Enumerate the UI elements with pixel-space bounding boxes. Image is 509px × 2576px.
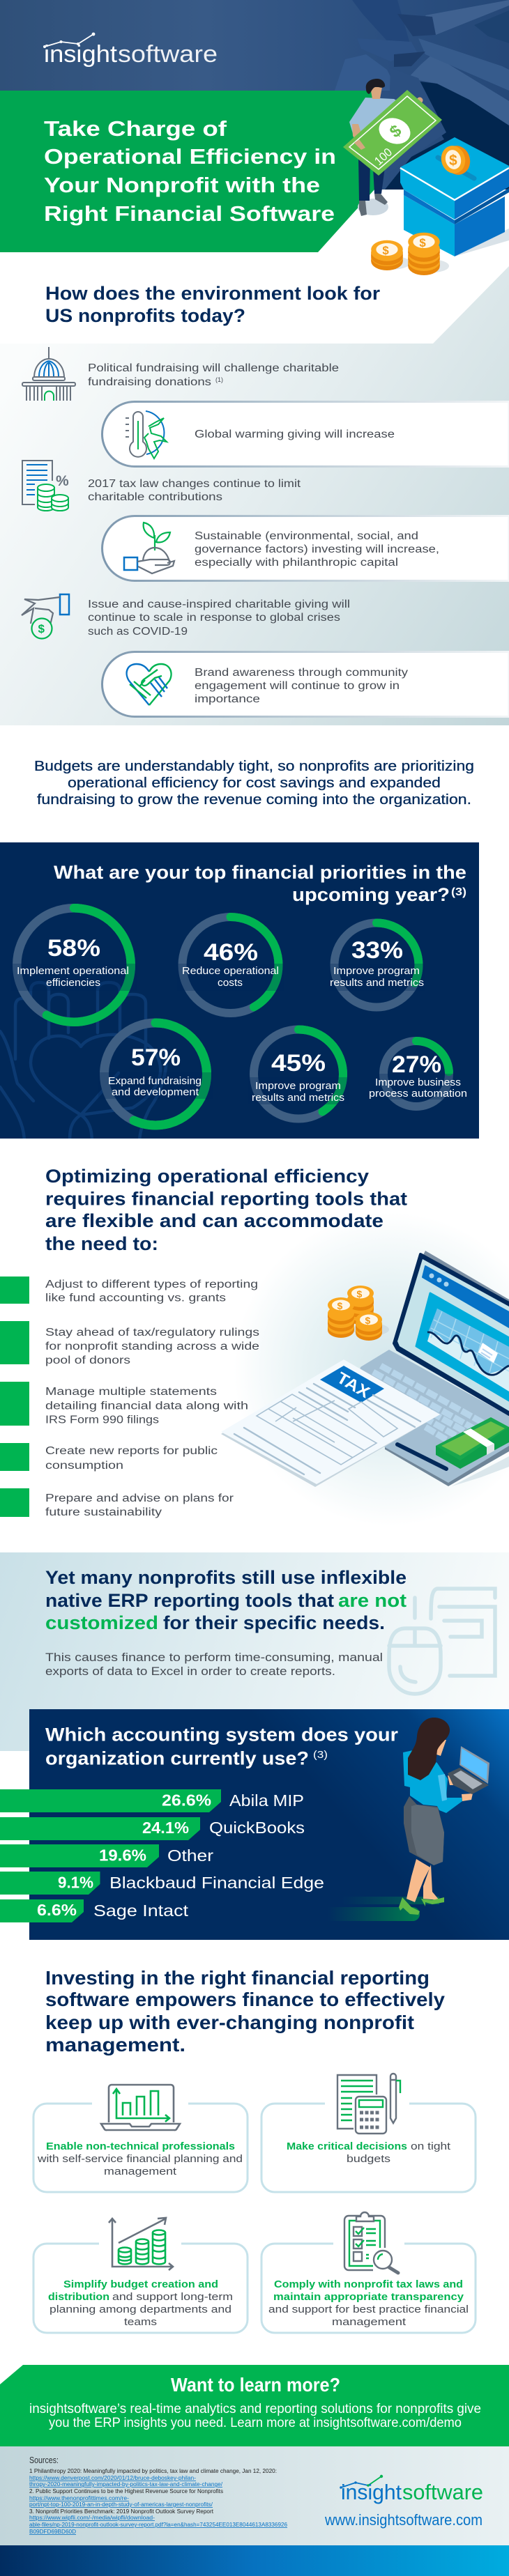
text: cause-inspired giving: Issue and cause-inspired charitable giving will: [88, 599, 350, 610]
bar: QuickBooks 24.1%: 24.1%: [142, 1819, 189, 1837]
text: 2017 tax law: charitable contributions: [88, 491, 222, 503]
card: enable non-technical professionals: [33, 2085, 248, 2192]
panel: accounting system survey: [0, 1709, 509, 1940]
heading: accounting system: organization currently use?: [45, 1748, 309, 1768]
illustration: donation box with coins: [371, 137, 509, 275]
heading: environment: US nonprofits today?: [45, 305, 245, 326]
heading: optimizing efficiency: requires financial reporting tools that: [45, 1189, 407, 1210]
text: sources: port/npt-top-100-2019-an-in-depth-study-of-americas-largest-nonprofits/: [29, 2501, 213, 2508]
panel: pill sustainable investing: Sustainable (environmental, social, and: [195, 530, 418, 542]
donut 33% improve program results and metrics: Improve program: [333, 966, 420, 977]
list: reporting needs: for nonprofit standing across a wide: [45, 1341, 259, 1352]
logo: insightsoftware white: [43, 33, 218, 68]
text: sources: 3. Nonprofit Priorities Benchmark: 2019 Nonprofit Outlook Survey Report: [29, 2508, 214, 2515]
text: sources: 1 Philanthropy 2020: Meaningfully impacted by politics, tax law and climate change, Jan 12, 2020:: [29, 2468, 277, 2474]
list: reporting needs: future sustainability: [45, 1506, 162, 1518]
text: 2017 tax law: [88, 478, 301, 503]
list: reporting needs: like fund accounting vs. grants: [45, 1292, 226, 1304]
title: Take Charge of: [44, 116, 227, 141]
heading: inflexible ERP tools: customized: [45, 1612, 158, 1633]
text: sources: thropy-2020-meaningfully-impacted-by-politics-tax-law-and-climate-change/: [29, 2481, 223, 2488]
bar: Other 19.6%: Other: [167, 1846, 213, 1865]
illustration: man holding a banknote: 100: [372, 146, 395, 168]
header photo background: [0, 0, 509, 190]
card: make critical decisions: Make critical decisions: [287, 2141, 407, 2152]
card: make critical decisions: budgets: [347, 2154, 390, 2165]
text: political fundraising: (1): [215, 376, 223, 383]
text: budgets statement: Budgets are understandably tight, so nonprofits are prioritizing: [34, 759, 474, 774]
logo: insightsoftware color: insight: [341, 2480, 402, 2504]
bar: Abila MIP 26.6%: [0, 1789, 304, 1812]
bar: QuickBooks 24.1%: [0, 1817, 305, 1840]
text: budgets statement: [34, 759, 474, 808]
card: comply with tax laws: [261, 2212, 476, 2333]
heading: accounting system: Which accounting system does your: [45, 1724, 399, 1745]
logo: insightsoftware white: software: [118, 41, 218, 68]
illustration: man holding a banknote: $: [386, 121, 406, 142]
heading: accounting system: (3): [313, 1749, 328, 1761]
list: reporting needs: Manage multiple statements: [45, 1386, 217, 1398]
panel: call to action: [0, 2365, 509, 2446]
donut 58% implement operational efficiencies: [11, 908, 137, 1022]
card: comply with tax laws: management: [332, 2317, 406, 2328]
panel: call to action: Want to learn more?: [171, 2374, 340, 2396]
panel: pill sustainable investing: especially with philanthropic capital: [195, 557, 398, 569]
illustration: donation box with coins: $: [419, 236, 426, 249]
text: 2017 tax law: 2017 tax law changes continue to limit: [88, 478, 301, 490]
card: simplify budget creation: planning among departments and: [50, 2304, 231, 2315]
panel: financial priorities: [0, 842, 479, 1143]
illustration: donation box with coins: $: [449, 153, 457, 169]
text: sources: Sources:: [29, 2455, 59, 2465]
bar: Sage Intact 6.6%: Sage Intact: [93, 1902, 189, 1920]
heading: optimizing efficiency: the need to:: [45, 1233, 158, 1254]
donut 33% improve program results and metrics: results and metrics: [330, 978, 424, 989]
icon: mouse and document watermark: [389, 1589, 495, 1694]
panel: pill brand awareness: importance: [195, 693, 260, 705]
card: comply with tax laws: maintain appropriate transparency: [273, 2292, 464, 2303]
panel: pill brand awareness: engagement will continue to grow in: [195, 680, 400, 692]
heading: inflexible ERP tools: [45, 1567, 407, 1633]
text: manual exports: This causes finance to perform time-consuming, manual: [45, 1651, 383, 1664]
card: make critical decisions: on tight: [411, 2141, 450, 2152]
donut 27% improve business process automation: 27%: [392, 1051, 441, 1078]
list: reporting needs: Prepare and advise on plans for: [45, 1493, 234, 1504]
donut 57% expand fundraising and development: [98, 1023, 213, 1125]
donut 58% implement operational efficiencies: efficiencies: [46, 978, 100, 989]
icon: document, calculator and pen: [337, 2074, 400, 2134]
heading: environment: How does the environment look for: [45, 283, 381, 304]
text: sources: https://www.thenonprofittimes.com/re-: [29, 2495, 129, 2501]
bar: Abila MIP 26.6%: 26.6%: [162, 1791, 211, 1809]
panel: pill sustainable investing: governance factors) investing will increase,: [195, 543, 439, 555]
text: sources: B09DFD69BD60D: [29, 2529, 76, 2535]
list: reporting needs: Stay ahead of tax/regulatory rulings: [45, 1327, 259, 1339]
heading: priorities: (3): [451, 886, 466, 898]
panel: pill global warming: Global warming giving will increase: [195, 429, 395, 440]
heading: priorities: What are your top financial priorities in the: [54, 862, 466, 883]
panel: call to action: you the ERP insights you need. Learn more at insightsoftware.com/demo: [49, 2416, 462, 2430]
title: Right Financial Software: [44, 201, 335, 226]
illustration: woman with laptop: [328, 1718, 489, 1921]
donut 27% improve business process automation: Improve business: [375, 1077, 461, 1088]
text: political fundraising: fundraising donations: [88, 376, 211, 388]
background: hands and heart outline: [0, 982, 166, 1143]
illustration: laptop, tax form, coins and cash: [221, 1251, 509, 1487]
illustration: laptop, tax form, coins and cash: $: [365, 1315, 371, 1326]
glow behind illustration: [234, 1212, 509, 1526]
icon: hand dropping a coin: $: [38, 622, 45, 635]
text: manual exports: exports of data to Excel in order to create reports.: [45, 1665, 335, 1678]
illustration: man holding a banknote: [343, 79, 442, 216]
illustration: donation box with coins: $: [382, 244, 389, 257]
illustration: laptop, tax form, coins and cash: TAX: [334, 1368, 374, 1402]
logo: insightsoftware color: software: [402, 2480, 483, 2504]
text: cause-inspired giving: continue to scale in response to global crises: [88, 612, 340, 624]
bar: Sage Intact 6.6%: 6.6%: [37, 1901, 77, 1919]
card: simplify budget creation: teams: [124, 2317, 157, 2328]
donut 27% improve business process automation: process automation: [369, 1088, 467, 1100]
panel: pill global warming: [102, 401, 509, 467]
card: make critical decisions: [261, 2074, 476, 2192]
heading: optimizing efficiency: are flexible and can accommodate: [45, 1210, 383, 1231]
title: [44, 116, 336, 226]
donut 46% reduce operational costs: costs: [218, 978, 243, 989]
heading: investing in reporting software: Investing in the right financial reporting: [45, 1967, 430, 1989]
heading: inflexible ERP tools: native ERP reporting tools that: [45, 1590, 334, 1611]
list: reporting needs: Create new reports for public: [45, 1445, 218, 1457]
heading: environment: [45, 283, 381, 326]
card: comply with tax laws: Comply with nonprofit tax laws and: [274, 2279, 463, 2290]
card: simplify budget creation: [33, 2218, 248, 2333]
text: sources: able-files/np-2019-nonprofit-outlook-survey-report.pdf?la=en&hash=743254EE013E8044613A8336926: [29, 2522, 288, 2528]
title: Operational Efficiency in: [44, 144, 336, 169]
text: website url: www.insightsoftware.com: [324, 2511, 483, 2529]
text: political fundraising: [88, 362, 339, 388]
donut 27% improve business process automation: [369, 1041, 467, 1106]
bar: Abila MIP 26.6%: Abila MIP: [229, 1791, 304, 1810]
donut 33% improve program results and metrics: 33%: [351, 937, 403, 964]
text: cause-inspired giving: [88, 599, 350, 638]
panel: inflexible ERP tools background: [0, 1552, 509, 1751]
list: reporting needs: detailing financial data along with: [45, 1401, 248, 1412]
card: simplify budget creation: and support long-term: [112, 2292, 233, 2303]
text: manual exports: [45, 1651, 383, 1678]
heading: optimizing efficiency: Optimizing operational efficiency: [45, 1166, 369, 1187]
heading: investing in reporting software: [45, 1967, 445, 2056]
text: sources: https://www.denverpost.com/2020/01/12/bruce-deboskey-philan-: [29, 2475, 196, 2481]
card: enable non-technical professionals: Enable non-technical professionals: [46, 2141, 235, 2152]
heading: priorities: upcoming year?: [292, 884, 450, 905]
text: sources: https://www.wipfli.com/-/media/wipfli/download-: [29, 2515, 155, 2521]
panel: sources background: [0, 2446, 509, 2545]
icon: heart handshake: [127, 664, 172, 705]
list: reporting needs: [0, 1277, 259, 1518]
heading: inflexible ERP tools: for their specific needs.: [163, 1612, 385, 1633]
donut 45% improve program results and metrics: [248, 1030, 349, 1119]
heading: investing in reporting software: management.: [45, 2034, 185, 2056]
card: enable non-technical professionals: with self-service financial planning and: [37, 2154, 243, 2165]
icon: thermometer and globe: [126, 411, 167, 458]
panel: pill brand awareness: Brand awareness through community: [195, 667, 408, 679]
donut 46% reduce operational costs: [177, 917, 284, 1013]
heading: accounting system: [45, 1724, 399, 1768]
bar: Other 19.6%: [0, 1844, 213, 1867]
donut 57% expand fundraising and development: Expand fundraising: [108, 1076, 202, 1087]
text: budgets statement: operational efficiency for cost savings and expanded: [68, 776, 441, 791]
icon: clipboard checklist with magnifier: [344, 2212, 398, 2273]
list: reporting needs: IRS Form 990 filings: [45, 1414, 159, 1426]
panel: green title banner: [0, 91, 374, 252]
illustration: laptop, tax form, coins and cash: $: [337, 1300, 343, 1311]
heading: inflexible ERP tools: Yet many nonprofits still use inflexible: [45, 1567, 407, 1588]
donut 57% expand fundraising and development: 57%: [131, 1044, 181, 1071]
bar: Blackbaud Financial Edge 9.1%: 9.1%: [58, 1873, 93, 1891]
bar: Sage Intact 6.6%: [0, 1899, 189, 1922]
bar: Other 19.6%: 19.6%: [99, 1846, 146, 1865]
donut 58% implement operational efficiencies: 58%: [47, 935, 100, 962]
text: budgets statement: fundraising to grow the revenue coming into the organization.: [37, 792, 471, 808]
bar: Blackbaud Financial Edge 9.1%: [0, 1872, 324, 1895]
icon: capitol building: [22, 347, 75, 401]
donut 46% reduce operational costs: 46%: [204, 939, 258, 966]
heading: investing in reporting software: keep up with ever-changing nonprofit: [45, 2012, 414, 2033]
donut 58% implement operational efficiencies: Implement operational: [17, 966, 129, 977]
heading: investing in reporting software: software empowers finance to effectively: [45, 1989, 445, 2010]
text: political fundraising: Political fundraising will challenge charitable: [88, 362, 339, 374]
title: Your Nonprofit with the: [44, 173, 320, 197]
donut 33% improve program results and metrics: [329, 923, 425, 1008]
icon: laptop with chart: [101, 2085, 180, 2130]
heading: priorities: [54, 862, 466, 905]
list: reporting needs: Adjust to different types of reporting: [45, 1279, 258, 1290]
list: reporting needs: pool of donors: [45, 1355, 130, 1366]
text: cause-inspired giving: such as COVID-19: [88, 626, 188, 638]
donut 57% expand fundraising and development: and development: [112, 1087, 199, 1098]
logo: insightsoftware color: [340, 2475, 483, 2504]
footer gradient bar: [0, 2545, 509, 2576]
card: simplify budget creation: Simplify budget creation and: [63, 2279, 218, 2290]
illustration: laptop, tax form, coins and cash: $: [357, 1288, 363, 1299]
donut 45% improve program results and metrics: 45%: [271, 1050, 326, 1077]
floor white area: [318, 190, 509, 279]
heading: inflexible ERP tools: are not: [338, 1590, 407, 1611]
card: comply with tax laws: and support for best practice financial: [268, 2304, 469, 2315]
icon: hand dropping a coin: [22, 594, 69, 638]
bar: QuickBooks 24.1%: QuickBooks: [209, 1819, 305, 1837]
bar: Blackbaud Financial Edge 9.1%: Blackbaud Financial Edge: [109, 1874, 324, 1892]
icon: growth chart with coin stacks: [109, 2218, 173, 2270]
logo: insightsoftware white: insight: [44, 41, 118, 68]
text: sources: 2. Public Support Continues to be the Highest Revenue Source for Nonprofits: [29, 2488, 223, 2494]
heading: optimizing efficiency: [45, 1166, 407, 1254]
donut 46% reduce operational costs: Reduce operational: [182, 966, 279, 977]
text: sources: [29, 2455, 288, 2535]
card: enable non-technical professionals: management: [104, 2166, 176, 2177]
panel: pill brand awareness: [102, 652, 509, 716]
icon: plant in hand: [124, 523, 174, 573]
donut 45% improve program results and metrics: results and metrics: [252, 1093, 344, 1104]
card: simplify budget creation: distribution: [48, 2292, 109, 2303]
panel: pill sustainable investing: [102, 516, 509, 581]
panel: environment gradient background: [0, 266, 509, 725]
icon: tax document with coins: %: [56, 473, 69, 489]
panel: call to action: insightsoftware’s real-time analytics and reporting solutions for nonprofits give: [29, 2402, 481, 2416]
donut 45% improve program results and metrics: Improve program: [255, 1081, 341, 1092]
icon: tax document with coins: [22, 461, 69, 511]
list: reporting needs: consumption: [45, 1460, 123, 1472]
